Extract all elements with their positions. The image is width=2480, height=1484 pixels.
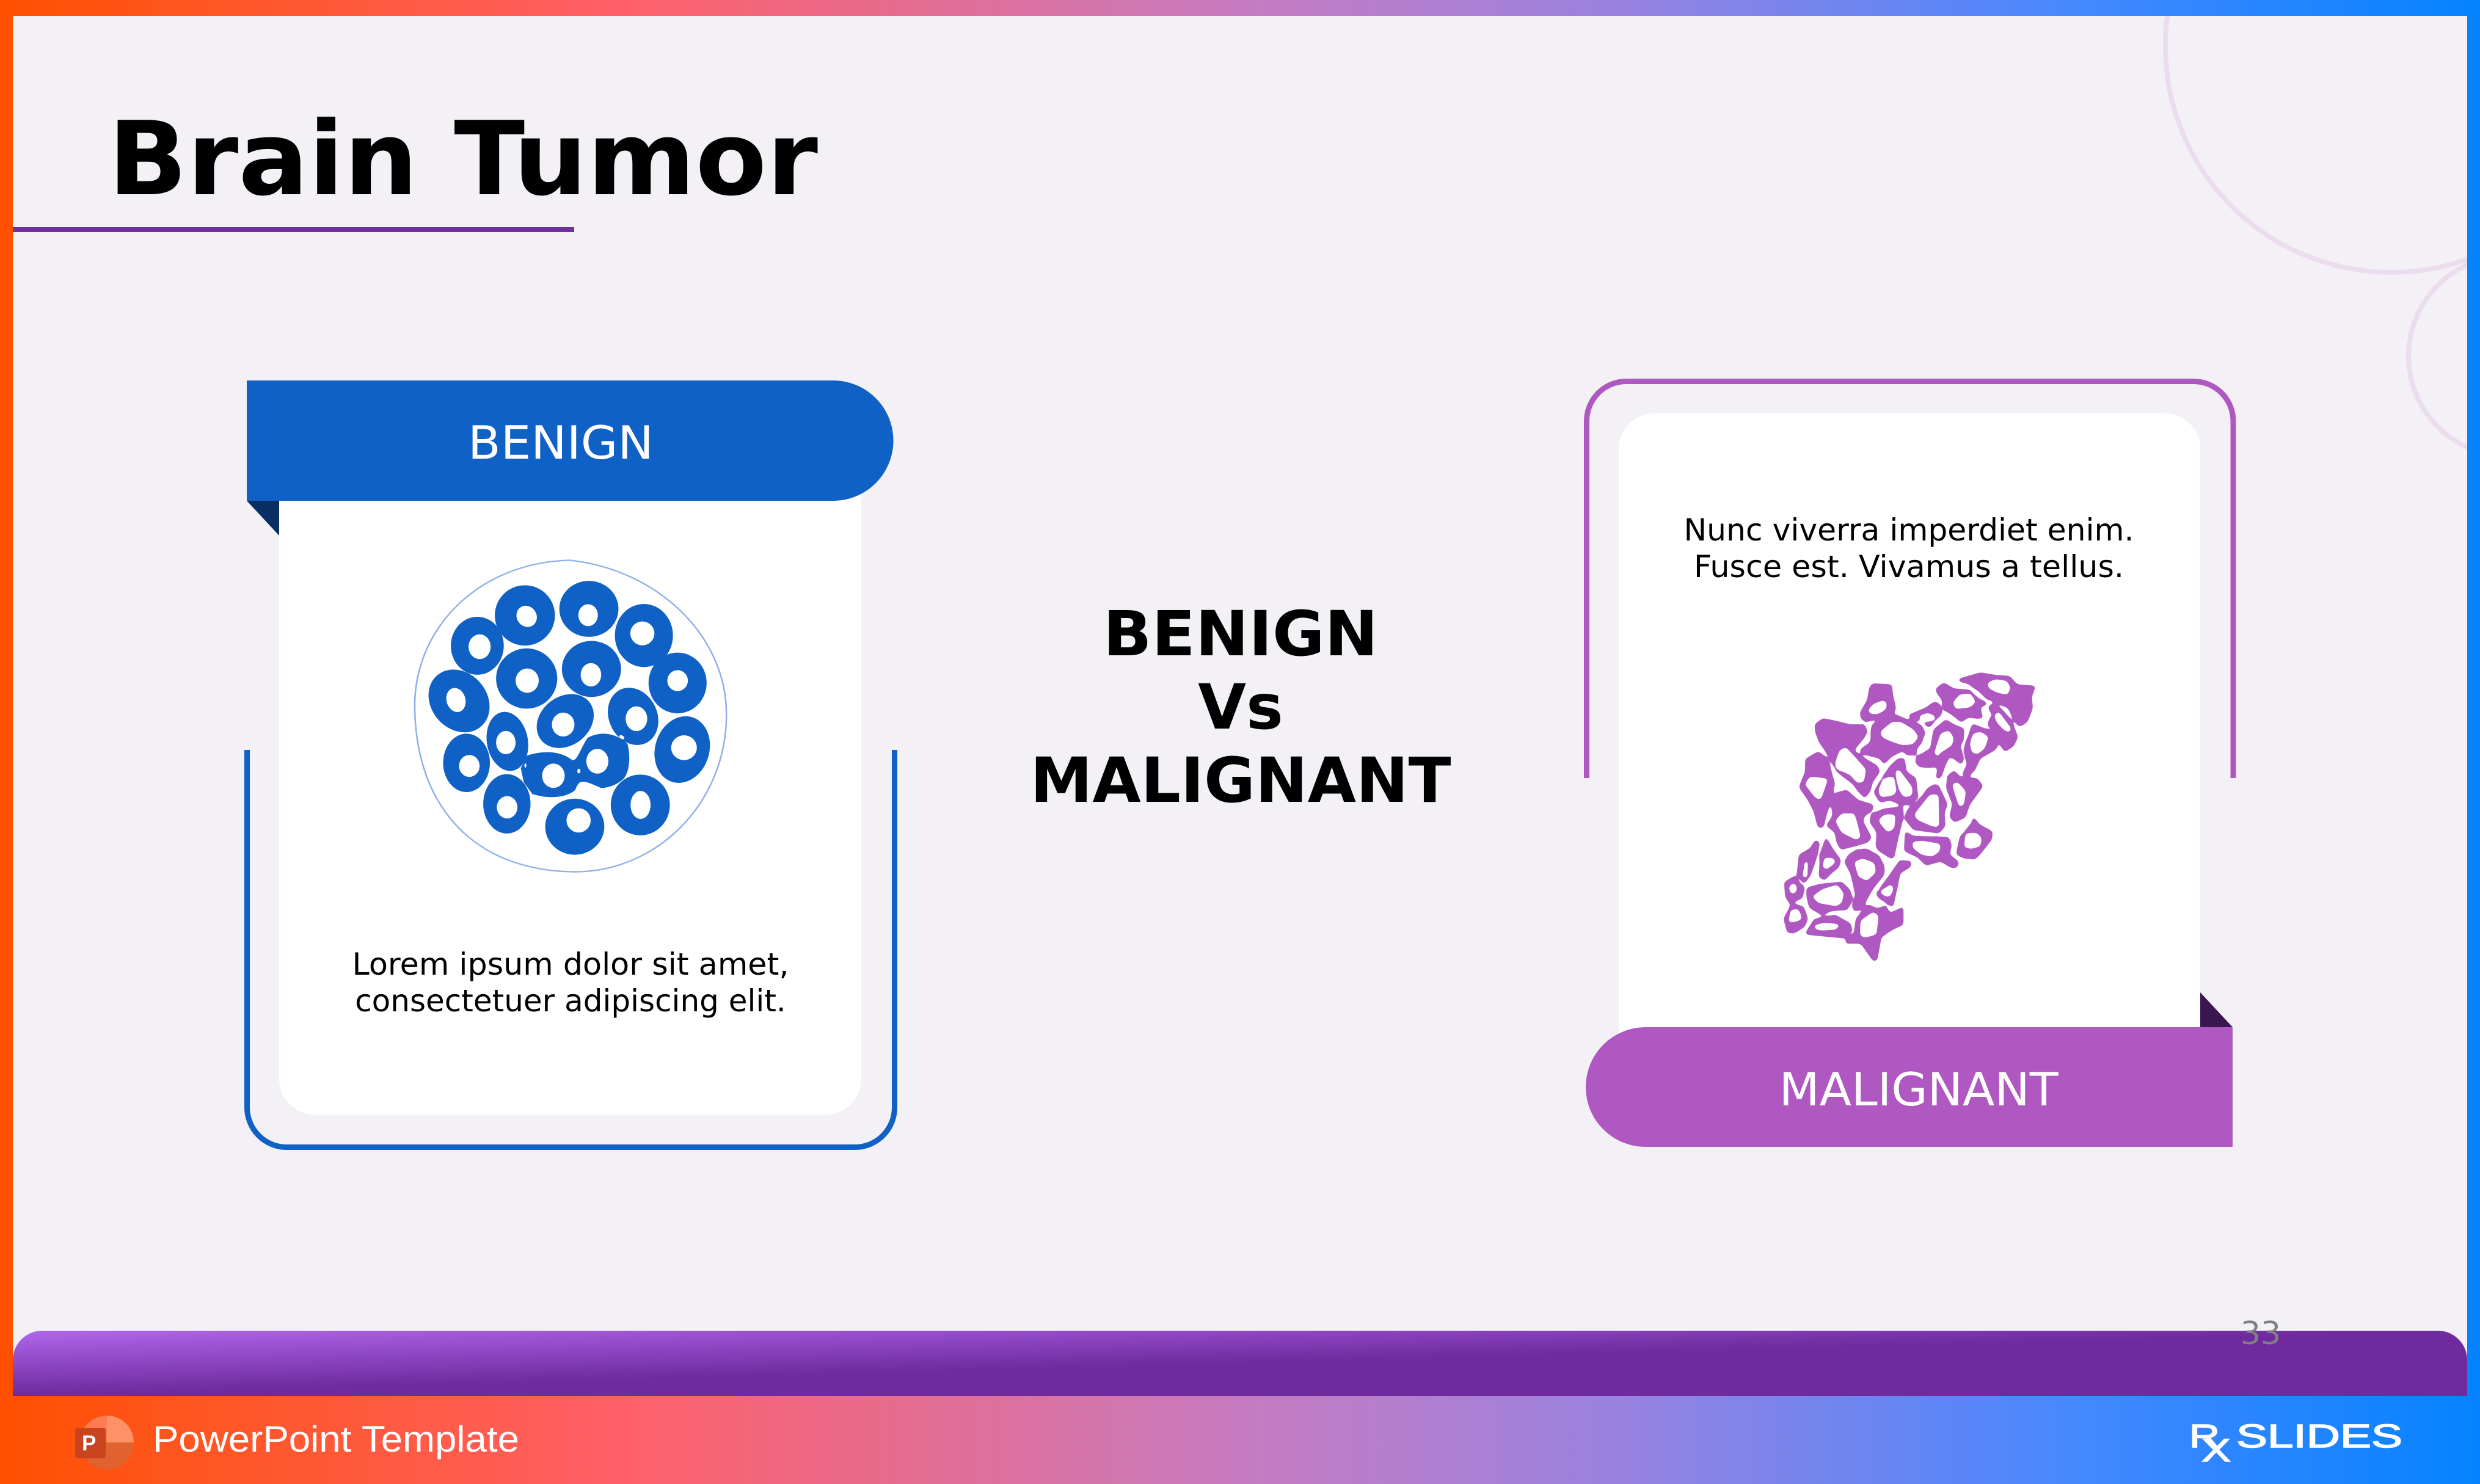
benign outline bracket: [247, 750, 895, 1147]
malignant header band: [1586, 1027, 2233, 1147]
panel: benign: [247, 380, 895, 1147]
icon: PowerPoint logo: P: [82, 1431, 96, 1455]
benign header label: BENIGN: [468, 416, 654, 470]
malignant ribbon fold: [2200, 992, 2233, 1027]
title underline: [13, 227, 574, 232]
page number: 33: [2241, 1315, 2281, 1352]
title: Brain Tumor: [108, 100, 818, 219]
logo: Rx Slides: SLIDES: [2236, 1418, 2402, 1455]
benign description: [352, 947, 789, 1019]
logo: Rx Slides: R: [2189, 1418, 2220, 1455]
benign white card: [279, 489, 861, 1115]
footer bar: [0, 1396, 2480, 1484]
malignant header label: MALIGNANT: [1779, 1063, 2059, 1116]
icon: PowerPoint logo: [75, 1416, 134, 1469]
benign ribbon fold: [247, 501, 279, 536]
logo: Rx Slides: X: [2201, 1433, 2231, 1469]
malignant description: [1683, 512, 2134, 584]
center heading: benign vs malignant: MALIGNANT: [1030, 744, 1451, 817]
center heading: benign vs malignant: BENIGN: [1103, 598, 1378, 671]
malignant description: Fusce est. Vivamus a tellus.: [1694, 549, 2124, 584]
bottom purple band: [13, 1331, 2467, 1396]
background decoration: circles: [2165, 0, 2480, 456]
center heading: benign vs malignant: [1030, 598, 1451, 817]
malignant outline bracket: [1586, 381, 2233, 778]
benign description: Lorem ipsum dolor sit amet,: [352, 947, 789, 982]
logo: Rx Slides: [2189, 1418, 2402, 1469]
center heading: benign vs malignant: Vs: [1198, 671, 1283, 744]
benign description: consectetuer adipiscing elit.: [355, 983, 786, 1019]
benign header band: [247, 380, 893, 501]
panel: malignant: [1586, 381, 2233, 1147]
malignant white card: [1619, 413, 2200, 1038]
icon: malignant cells: [1783, 672, 2037, 962]
footer label: PowerPoint Template: [153, 1419, 519, 1460]
icon: benign cells: [415, 560, 726, 872]
malignant description: Nunc viverra imperdiet enim.: [1683, 512, 2134, 548]
